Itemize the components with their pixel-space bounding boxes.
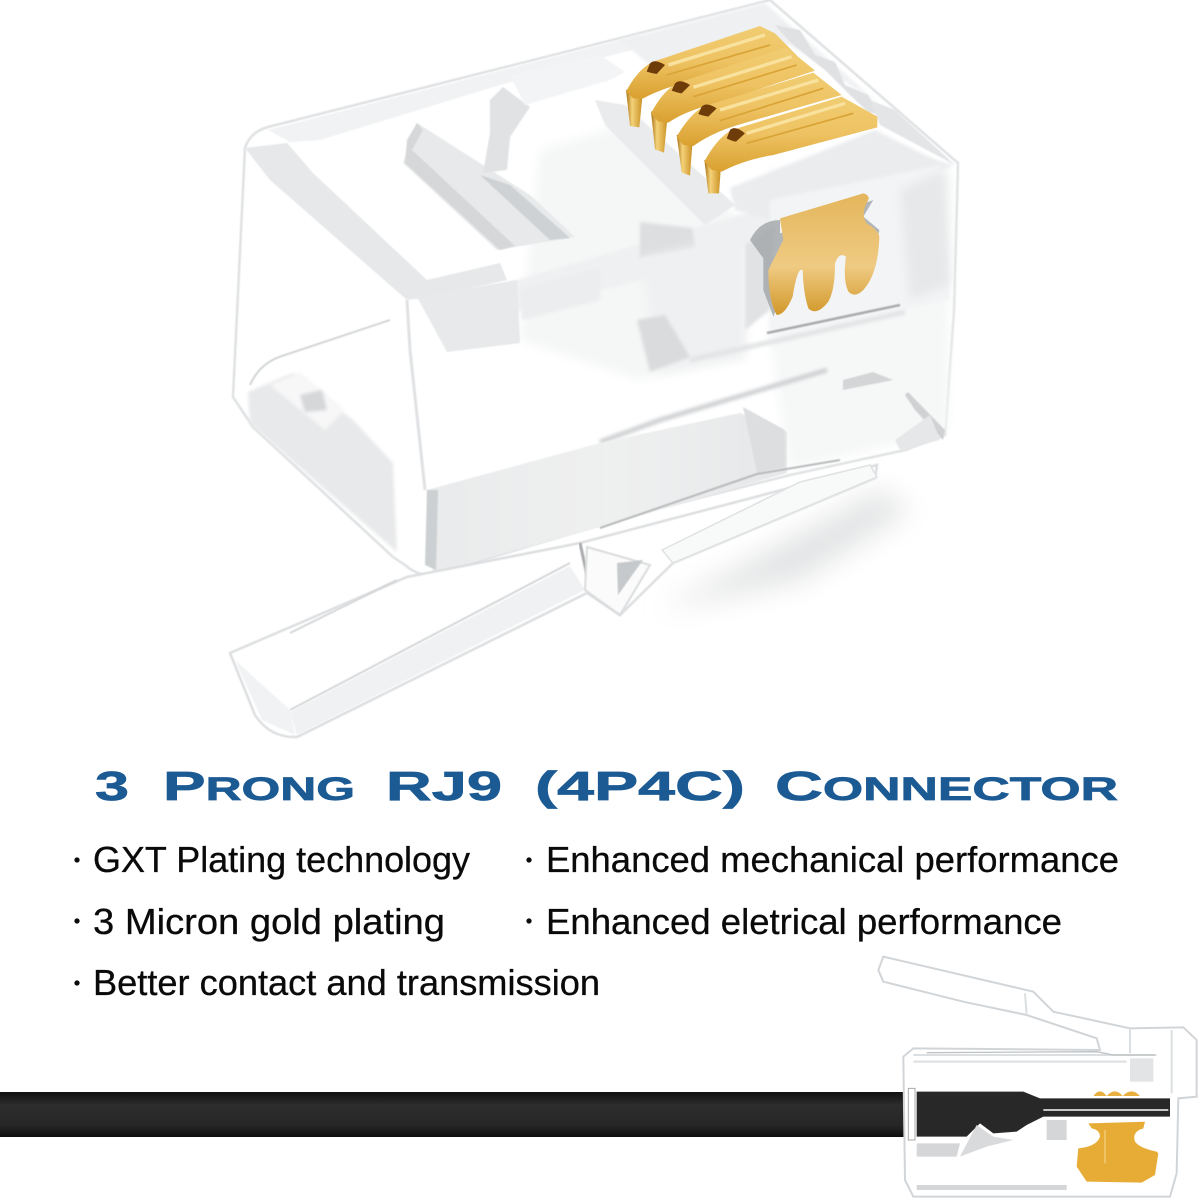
cable <box>0 1092 905 1137</box>
feature: mechanical: Enhanced mechanical performance <box>546 839 1119 880</box>
title word: Connector: C ONNECTOR <box>775 763 1118 809</box>
feature: contact: Better contact and transmission <box>93 962 600 1003</box>
top rim band <box>245 143 507 300</box>
top strip to gold <box>510 55 625 105</box>
title <box>95 763 1118 809</box>
soft shadow under connector <box>660 490 910 610</box>
prong window <box>770 165 950 335</box>
connector body <box>233 0 958 575</box>
title word: Prong: P RONG <box>163 763 355 809</box>
contact comb ridges <box>775 25 880 115</box>
title word: (4P4C): (4P4C) <box>535 763 745 809</box>
front top ledge <box>510 150 955 312</box>
main connector illustration <box>230 0 958 737</box>
soft washes <box>520 120 745 380</box>
gold top contacts <box>626 26 877 193</box>
feature list <box>74 839 1119 1003</box>
hook <box>483 87 530 173</box>
center blocks <box>417 280 520 352</box>
feature: GXT plating: GXT Plating technology <box>93 839 470 880</box>
body outline <box>233 0 958 575</box>
right latch housing <box>843 372 893 390</box>
front band <box>427 413 787 573</box>
title word: 3: 3 <box>95 763 129 809</box>
feature: electrical: Enhanced eletrical performance <box>546 901 1062 942</box>
gold front prong plate <box>750 193 879 317</box>
cable with small connector <box>0 957 1197 1197</box>
latch <box>230 465 877 737</box>
left lower face <box>248 373 397 552</box>
title word: RJ9: RJ9 <box>386 763 502 809</box>
small connector <box>878 957 1197 1197</box>
seam lines <box>767 305 900 333</box>
top rail <box>403 123 575 250</box>
feature: micron gold: 3 Micron gold plating <box>93 901 445 942</box>
